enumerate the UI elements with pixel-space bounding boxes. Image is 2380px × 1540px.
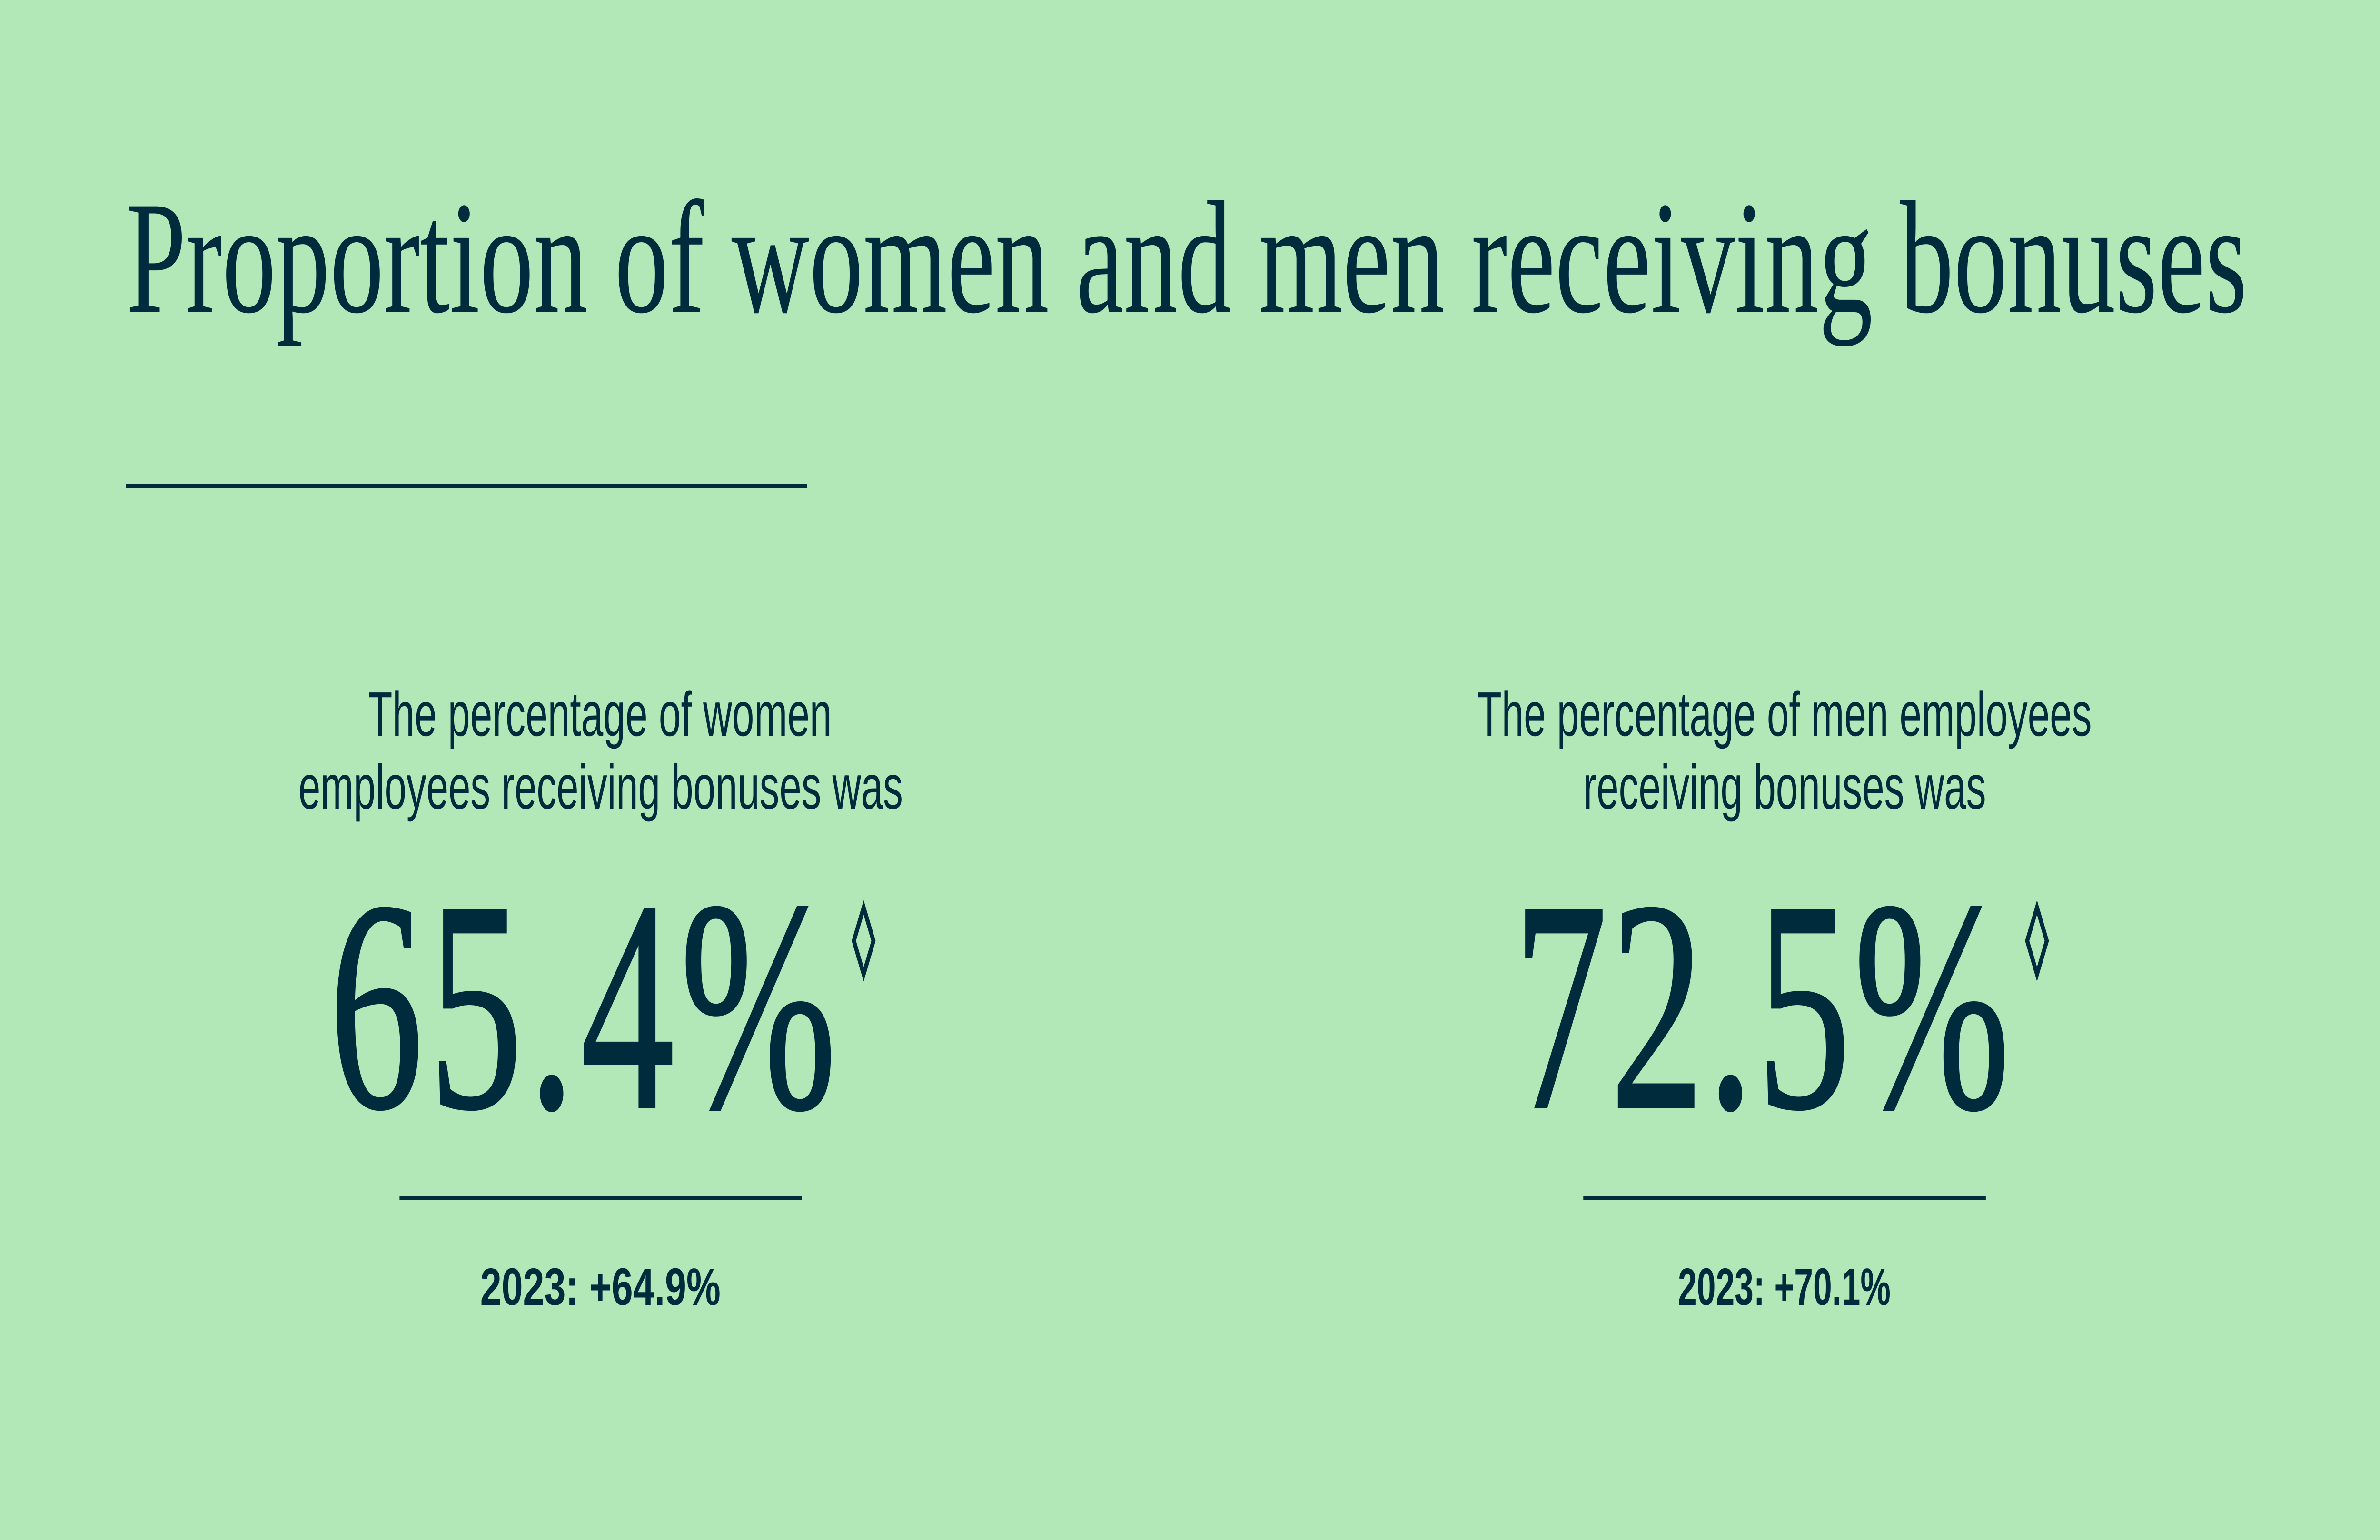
panel: men	[1478, 679, 2092, 1316]
men description text	[1478, 679, 2092, 822]
men percentage: 72.5%	[1513, 839, 2010, 1172]
women description text: employees receiving bonuses was	[298, 752, 903, 822]
women description text	[298, 679, 903, 822]
women description text: The percentage of women	[368, 679, 832, 750]
men description text: receiving bonuses was	[1583, 752, 1986, 822]
title: Proportion of women and men receiving bonuses	[126, 168, 2247, 347]
women 2023 comparison: 2023: +64.9%	[480, 1258, 721, 1316]
men 2023 comparison: 2023: +70.1%	[1678, 1258, 1891, 1316]
women percentage: 65.4%	[329, 839, 837, 1172]
icon: men diamond marker	[2027, 908, 2047, 974]
panel: women	[298, 679, 903, 1316]
icon: women diamond marker	[854, 908, 873, 974]
men description text: The percentage of men employees	[1478, 679, 2092, 750]
